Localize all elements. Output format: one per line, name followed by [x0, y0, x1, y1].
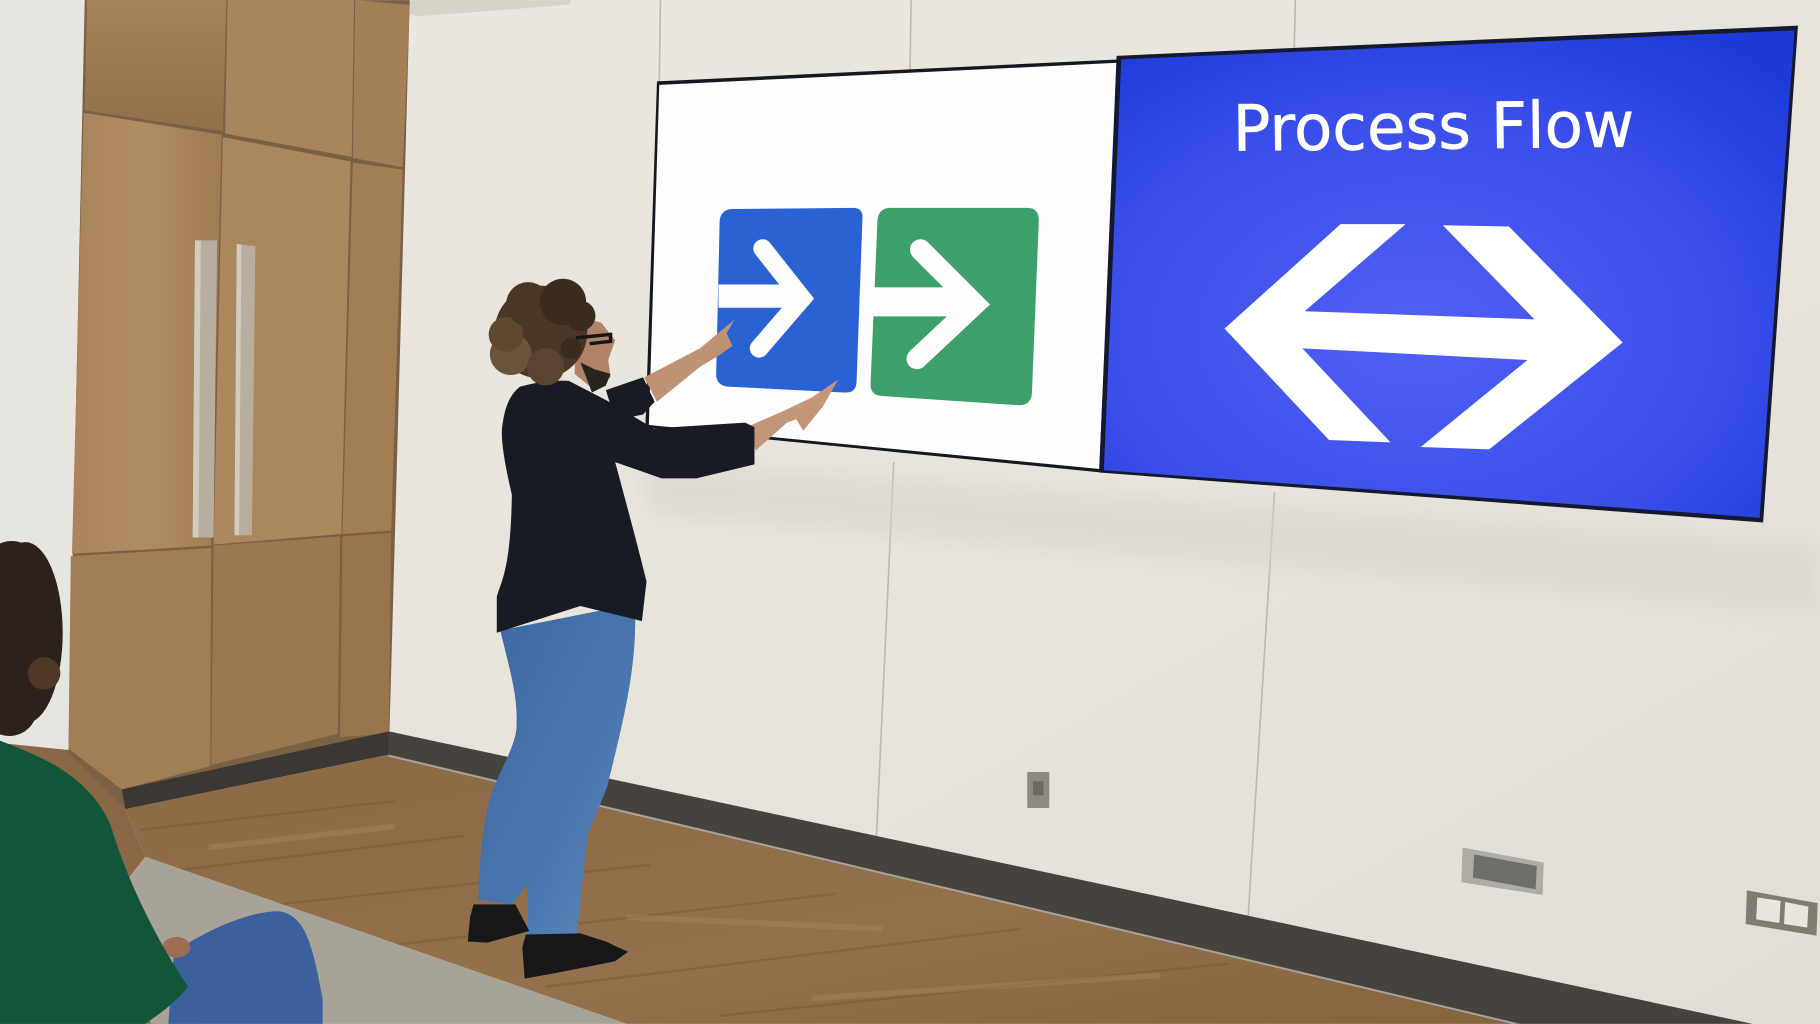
black shirt — [497, 381, 754, 633]
seated person's jeans — [168, 911, 323, 1024]
heading: Process Flow: Process Flow — [1232, 89, 1635, 167]
green sweater — [0, 741, 188, 1024]
ceiling strip — [354, 0, 571, 16]
right screen: blue panel — [1099, 26, 1798, 522]
cabinet door handles — [193, 240, 255, 538]
far sleeve — [606, 377, 655, 420]
icon: double-headed arrow — [1225, 224, 1623, 449]
wood floor — [125, 755, 1521, 1024]
wall outlet — [1746, 890, 1818, 936]
left screen: white panel — [645, 59, 1120, 473]
back shoe — [468, 904, 529, 943]
presenter — [468, 279, 838, 979]
beard — [580, 362, 611, 392]
floor vent — [1461, 847, 1544, 895]
curly hair — [489, 279, 595, 385]
wall panel seams — [659, 0, 1295, 923]
jeans — [478, 604, 635, 936]
floor backing under seated person — [0, 743, 197, 1024]
blue tile with arrow — [716, 208, 863, 393]
wall switch plate — [1027, 772, 1049, 808]
carpet — [116, 857, 627, 1024]
baseboard — [389, 731, 1753, 1024]
glasses — [576, 334, 611, 344]
seated person's curly hair — [0, 541, 63, 736]
left wall section — [0, 0, 87, 755]
wooden cabinet — [68, 0, 410, 809]
hand on lap — [162, 937, 190, 958]
far arm with pointing hand — [644, 319, 735, 402]
face — [575, 316, 615, 390]
front shoe — [522, 933, 628, 979]
screen shadow on wall — [638, 459, 1820, 615]
green tile with arrow — [871, 208, 1039, 405]
near arm hand — [749, 380, 838, 450]
seated audience member — [0, 541, 323, 1024]
